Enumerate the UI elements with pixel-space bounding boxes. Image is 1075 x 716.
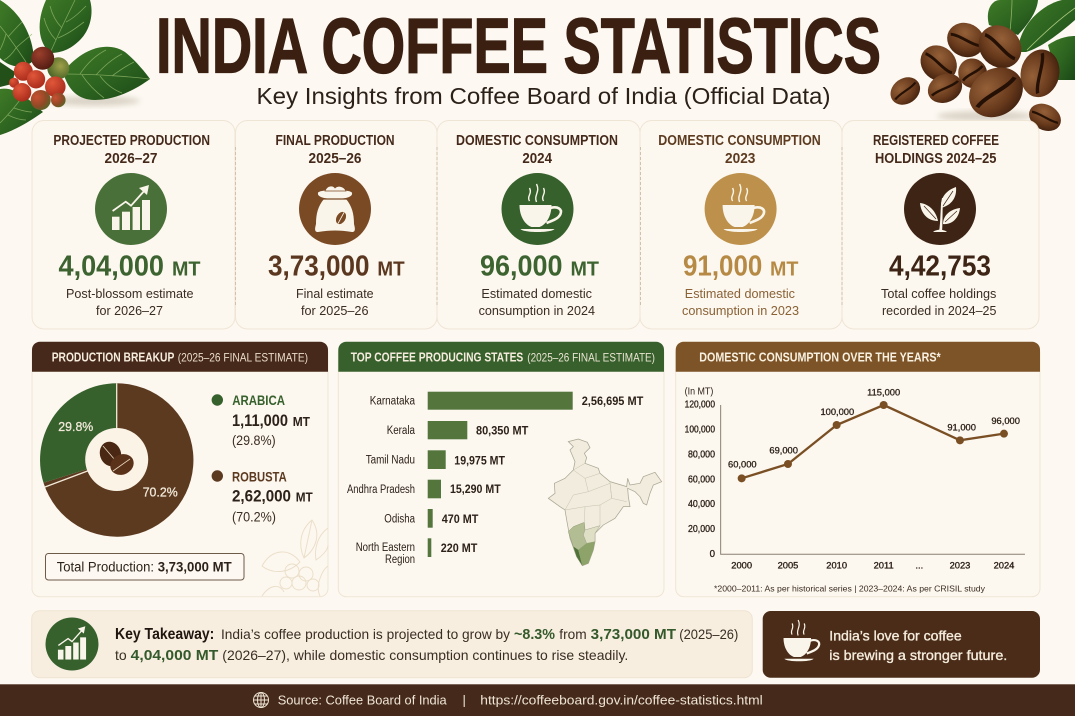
source text: | <box>462 692 466 707</box>
panel header: (2025–26 FINAL ESTIMATE) <box>178 351 308 365</box>
bar: north eastern region <box>356 538 478 566</box>
value: 91,000 MT: 91,000 <box>683 251 762 283</box>
message text <box>829 628 1007 663</box>
legend: arabica: MT <box>293 414 310 429</box>
legend: arabica: ARABICA <box>232 392 285 408</box>
panel: key takeaway <box>32 611 752 678</box>
description: Post-blossom estimate <box>66 287 194 301</box>
takeaway text: (2026–27), while domestic consumption continues to rise steadily. <box>222 647 628 663</box>
line chart: 2024 <box>994 560 1014 570</box>
bar: odisha: 470 MT <box>442 512 479 526</box>
legend: arabica <box>212 392 310 448</box>
description <box>881 287 996 318</box>
takeaway text: Key Takeaway: <box>115 626 214 643</box>
bar: tamil nadu: Tamil Nadu <box>366 454 415 466</box>
panel: domestic consumption 2023 <box>640 120 842 329</box>
heading: domestic consumption 2024 <box>456 133 618 167</box>
description <box>296 287 374 318</box>
description: Estimated domestic <box>481 287 592 301</box>
bar: tamil nadu <box>366 450 506 469</box>
line chart <box>685 386 1025 594</box>
value: 96,000 MT: 96,000 <box>480 251 562 283</box>
panel header: DOMESTIC CONSUMPTION OVER THE YEARS* <box>699 350 941 365</box>
legend: robusta: (70.2%) <box>232 510 276 525</box>
heading: registered holdings: REGISTERED COFFEE <box>873 133 999 149</box>
heading: domestic consumption 2024: DOMESTIC CONSUMPTION <box>456 133 618 149</box>
subtitle: Key Insights from Coffee Board of India (Official Data) <box>256 83 830 109</box>
decoration: roasted coffee beans and leaves <box>885 0 1075 136</box>
description <box>682 287 799 318</box>
legend: arabica: (29.8%) <box>232 433 276 448</box>
value: 96,000 MT: MT <box>570 258 599 281</box>
bar: tamil nadu: 19,975 MT <box>454 453 506 467</box>
panel header <box>338 342 664 372</box>
bar: north eastern region: North Eastern <box>356 542 415 554</box>
total production box: 3,73,000 MT <box>158 560 232 575</box>
panel: domestic consumption over the years <box>676 342 1040 597</box>
legend: robusta <box>212 469 313 525</box>
total production box <box>46 554 244 580</box>
heading: final production <box>276 133 395 167</box>
legend: arabica: 1,11,000 <box>232 411 288 430</box>
heading: projected production: 2026–27 <box>104 151 158 167</box>
heading: projected production: PROJECTED PRODUCTION <box>53 133 210 149</box>
heading: final production: FINAL PRODUCTION <box>276 133 395 149</box>
legend: robusta: MT <box>296 490 313 505</box>
line chart: 20,000 <box>688 524 715 535</box>
heading: domestic consumption 2023 <box>658 133 821 167</box>
description: recorded in 2024–25 <box>882 304 996 318</box>
bar: andhra pradesh: Andhra Pradesh <box>347 484 415 496</box>
panel: projected production <box>32 120 235 329</box>
description: for 2026–27 <box>96 304 163 318</box>
icon: growth chart <box>46 618 98 670</box>
bar: karnataka: 2,56,695 MT <box>582 394 644 408</box>
description <box>479 287 595 318</box>
bar: north eastern region: 220 MT <box>441 541 478 555</box>
description: Final estimate <box>296 287 374 301</box>
panel: closing message <box>763 611 1040 678</box>
total production box: Total Production: <box>57 560 154 575</box>
line chart: 60,000 <box>728 460 757 470</box>
takeaway text: 3,73,000 MT <box>591 626 676 643</box>
source text <box>278 692 763 707</box>
value: 91,000 MT: MT <box>770 258 799 281</box>
line chart: 2023 <box>950 560 970 570</box>
line chart: 2011 <box>874 560 894 570</box>
bar: odisha: Odisha <box>384 514 416 526</box>
takeaway text: ~8.3% <box>514 626 555 643</box>
line chart: ... <box>915 560 923 570</box>
panel: production breakup <box>32 342 328 597</box>
source text: https://coffeeboard.gov.in/coffee-statistics.html <box>480 692 763 707</box>
heading: projected production <box>53 133 210 167</box>
heading: final production: 2025–26 <box>308 151 362 167</box>
line chart: 2010 <box>826 560 847 570</box>
panel header <box>676 342 1040 372</box>
line chart: 60,000 <box>688 474 715 485</box>
footnote: *2000–2011: As per historical series | 2023–2024: As per CRISIL study <box>714 584 986 594</box>
line chart: 96,000 <box>991 416 1020 426</box>
panel header: PRODUCTION BREAKUP <box>52 351 174 365</box>
description: consumption in 2024 <box>479 304 595 318</box>
heading: domestic consumption 2023: 2023 <box>725 151 755 167</box>
legend: robusta: ROBUSTA <box>232 469 287 485</box>
panel: top coffee producing states <box>338 342 664 597</box>
bar: karnataka: Karnataka <box>370 395 416 407</box>
description <box>66 287 194 318</box>
description: for 2025–26 <box>301 304 369 318</box>
icon: coffee cup <box>784 620 819 661</box>
icon: coffee cup gold <box>705 173 777 245</box>
panel: domestic consumption 2024 <box>437 120 640 329</box>
bar: odisha <box>384 509 479 528</box>
message text: is brewing a stronger future. <box>829 647 1007 663</box>
icon: coffee beans <box>96 439 137 479</box>
description: Estimated domestic <box>685 287 795 301</box>
bar: kerala: Kerala <box>387 425 416 437</box>
description: Total coffee holdings <box>881 287 996 301</box>
line chart: 115,000 <box>867 388 900 398</box>
takeaway text: to <box>115 647 127 663</box>
bar: kerala <box>387 421 529 439</box>
heading: registered holdings: HOLDINGS 2024–25 <box>875 151 996 167</box>
panel: registered holdings <box>842 120 1039 329</box>
line chart: 100,000 <box>685 425 715 436</box>
takeaway text: from <box>559 626 587 642</box>
line chart: 69,000 <box>769 446 798 456</box>
panel header: (2025–26 FINAL ESTIMATE) <box>527 351 655 365</box>
map: india <box>548 439 662 566</box>
decoration: coffee leaves and berries <box>0 0 150 135</box>
line chart: 100,000 <box>820 407 854 417</box>
bar: andhra pradesh: 15,290 MT <box>450 482 501 496</box>
value: 4,42,753: 4,42,753 <box>889 251 991 283</box>
heading: domestic consumption 2023: DOMESTIC CONSUMPTION <box>658 133 821 149</box>
takeaway text: India’s coffee production is projected to grow by <box>221 626 510 642</box>
donut chart: 29.8% <box>58 419 94 434</box>
value: 4,04,000 MT: 4,04,000 <box>58 251 164 283</box>
icon: globe <box>254 692 268 708</box>
takeaway text <box>115 626 738 664</box>
bar: karnataka <box>370 392 644 410</box>
icon: growth chart <box>95 173 167 245</box>
icon: plant <box>904 173 976 245</box>
donut chart <box>40 383 193 537</box>
panel header <box>32 342 328 372</box>
line chart: 40,000 <box>688 499 715 510</box>
legend: robusta: 2,62,000 <box>232 487 291 506</box>
panel: final production <box>236 120 437 329</box>
line chart: 120,000 <box>685 400 715 411</box>
bar: kerala: 80,350 MT <box>476 423 529 437</box>
takeaway text: (2025–26) <box>679 626 738 642</box>
line chart: 80,000 <box>688 449 715 460</box>
source text: Source: Coffee Board of India <box>278 692 447 707</box>
description: consumption in 2023 <box>682 304 799 318</box>
value: 3,73,000 MT: 3,73,000 <box>268 251 370 283</box>
takeaway text: 4,04,000 MT <box>131 647 218 664</box>
decoration: coffee plant sketch <box>262 520 328 596</box>
line chart: 2005 <box>778 560 798 570</box>
panel header: TOP COFFEE PRODUCING STATES <box>351 351 523 365</box>
footer <box>0 684 1075 716</box>
line chart: 91,000 <box>947 422 976 432</box>
line chart: 0 <box>710 549 715 560</box>
bar: north eastern region: Region <box>385 554 415 566</box>
value: 3,73,000 MT: MT <box>377 258 405 281</box>
bar: andhra pradesh <box>347 480 501 498</box>
heading: registered holdings <box>873 133 999 167</box>
icon: coffee sack <box>299 173 371 245</box>
line chart: 2000 <box>731 560 752 570</box>
icon: coffee cup green <box>502 173 574 245</box>
value: 4,04,000 MT: MT <box>172 258 201 281</box>
donut chart: 70.2% <box>143 485 178 500</box>
heading: domestic consumption 2024: 2024 <box>522 151 552 167</box>
message text: India’s love for coffee <box>829 628 962 644</box>
line chart: (In MT) <box>685 386 713 397</box>
